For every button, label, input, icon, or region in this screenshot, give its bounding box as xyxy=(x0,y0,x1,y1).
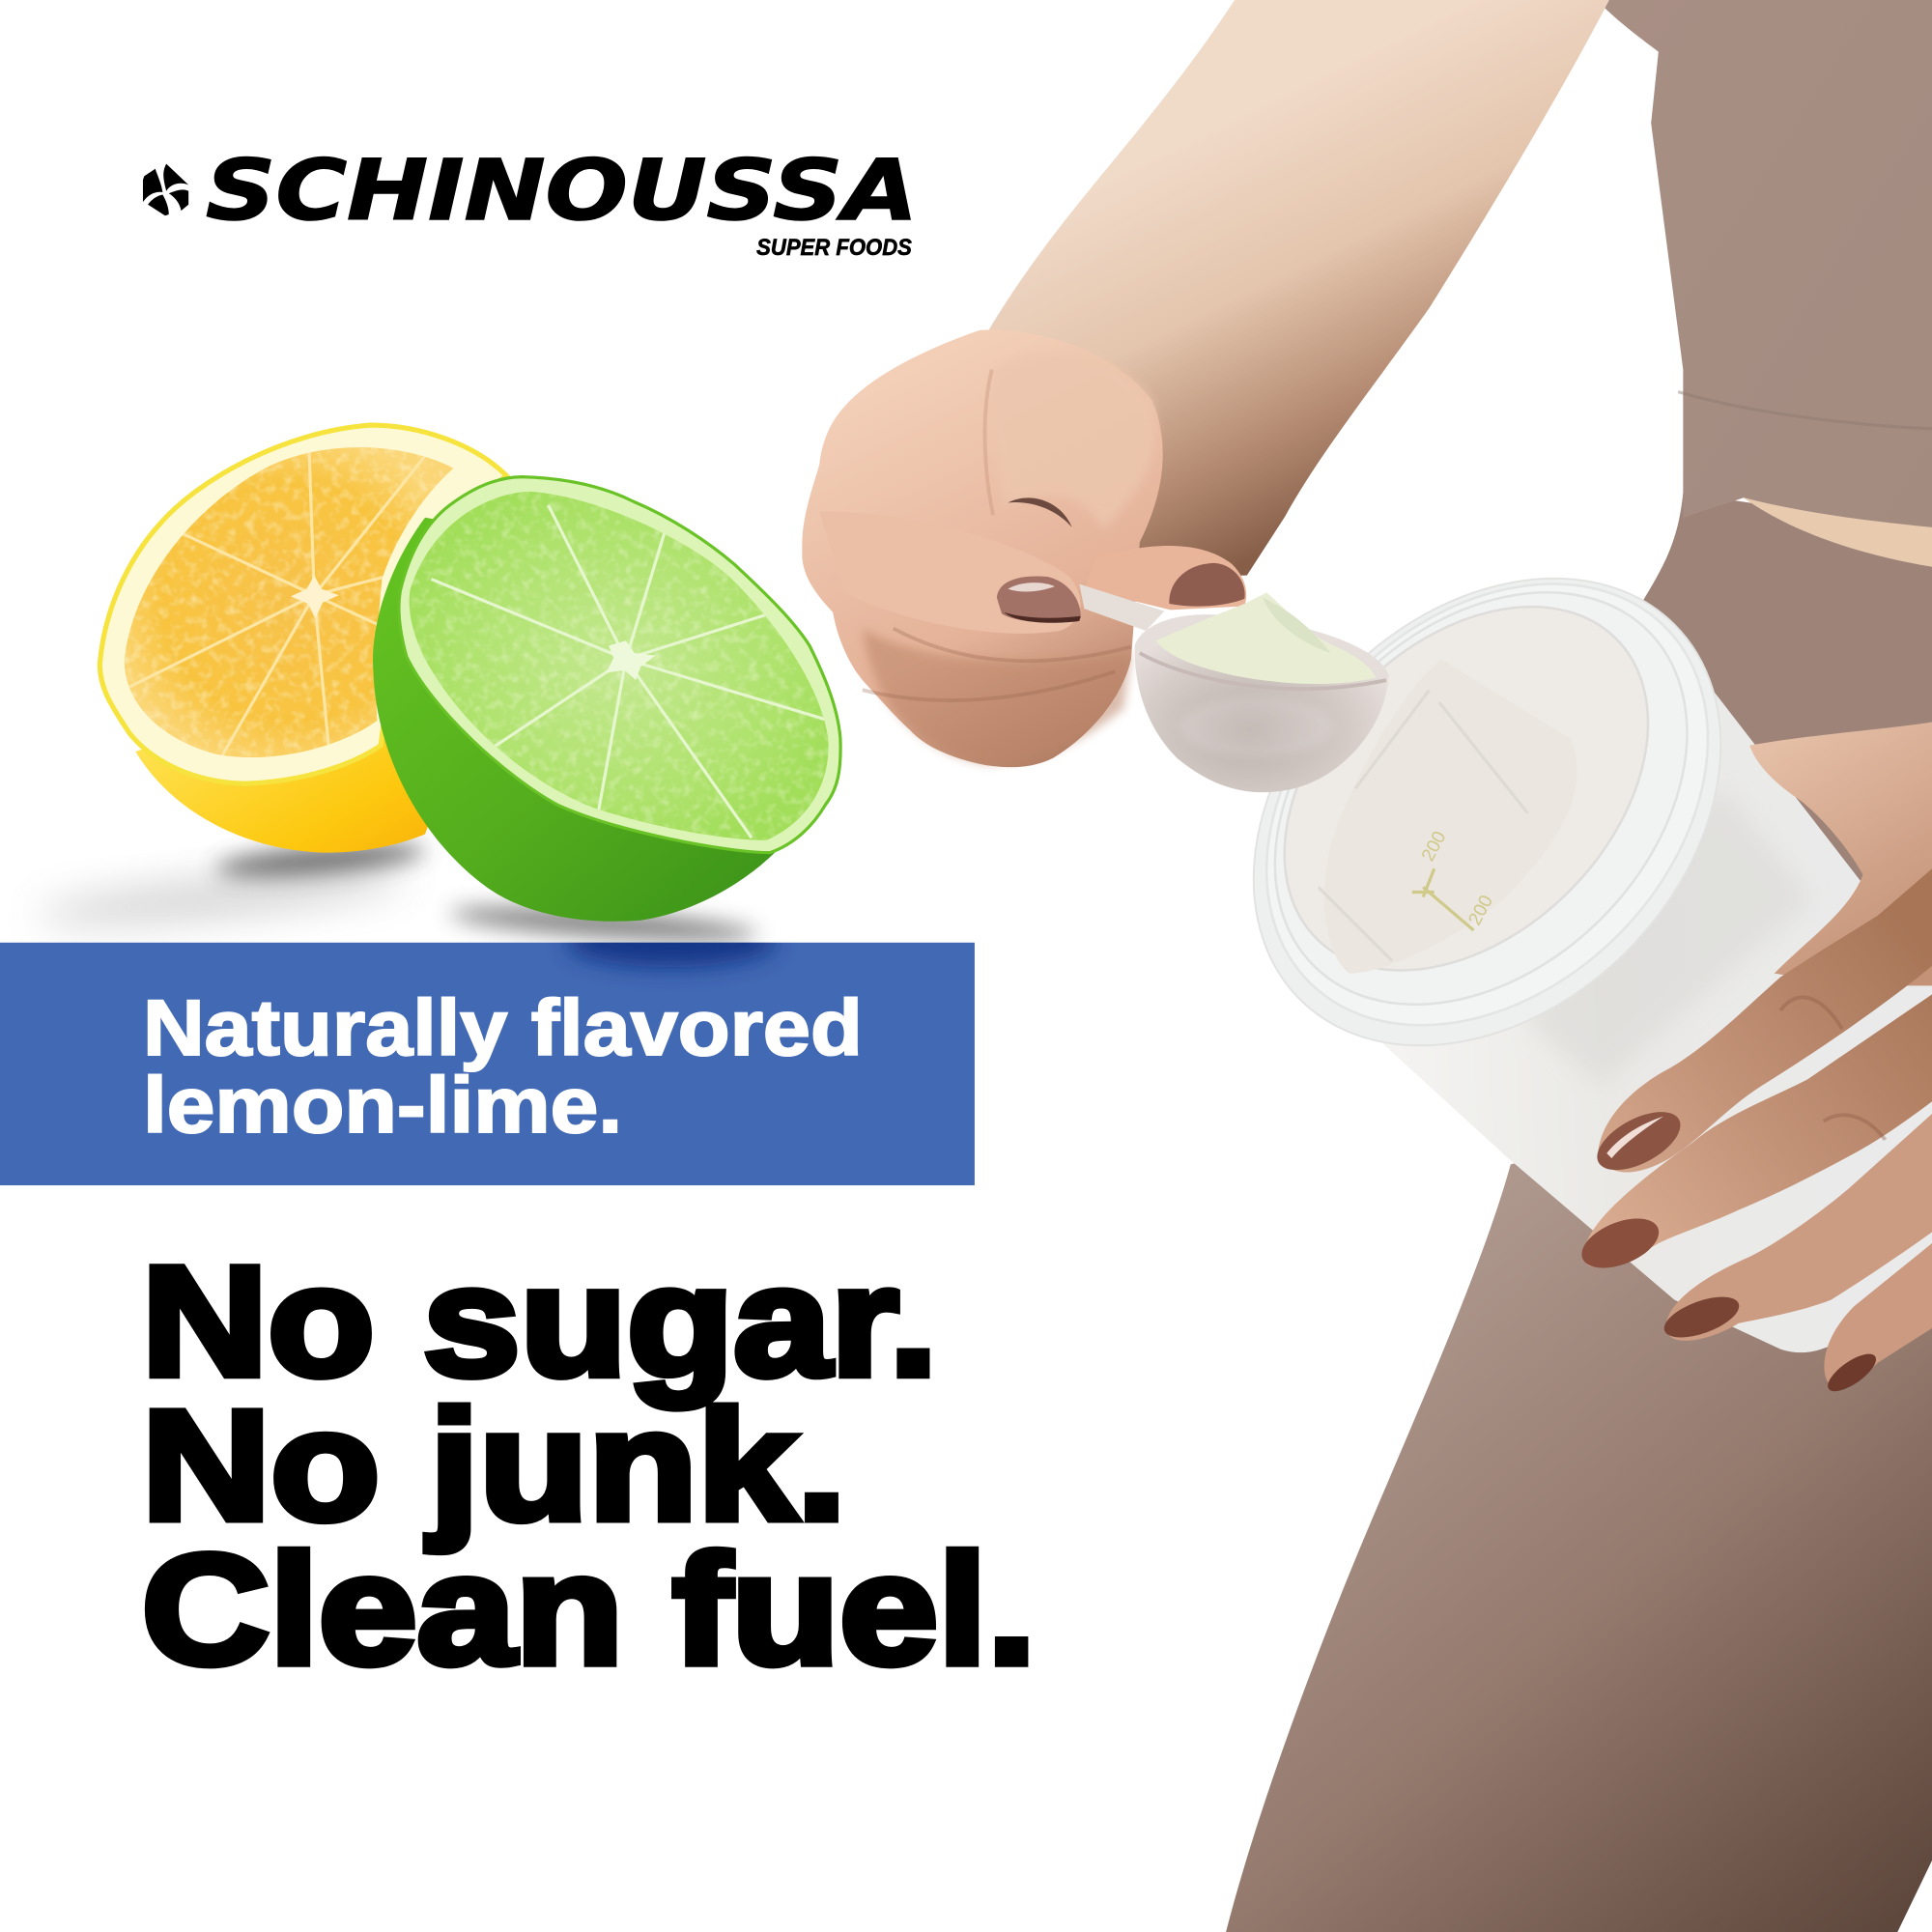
lime pith xyxy=(399,477,840,853)
scoop xyxy=(1079,584,1389,792)
headline line one: No sugar. xyxy=(142,1234,938,1408)
inner divider lines xyxy=(1319,690,1528,961)
index finger xyxy=(1084,546,1246,610)
leggings lower xyxy=(1226,1109,1932,1932)
powder mound xyxy=(1155,593,1377,684)
hand holding scoop xyxy=(802,329,1246,767)
measure markings xyxy=(1412,868,1474,930)
torso top garment xyxy=(1597,0,1932,532)
banner shadow xyxy=(560,943,784,978)
knuckle crease xyxy=(1780,997,1886,1140)
lime segments xyxy=(431,505,850,850)
measure label two: 200 xyxy=(1464,892,1497,929)
lime flesh xyxy=(410,492,829,840)
jar opening xyxy=(1213,536,1719,1041)
lime pulp texture xyxy=(401,487,838,850)
finger shadow xyxy=(863,629,1131,764)
rim ridge inner xyxy=(1194,511,1769,1086)
lemon rind xyxy=(135,640,493,853)
nail two xyxy=(1575,1208,1665,1278)
shaker jar xyxy=(1160,485,1932,1352)
lemon pith xyxy=(99,425,506,783)
banner line one: Naturally flavored xyxy=(143,984,863,1072)
hand back xyxy=(1749,722,1932,985)
folded knuckle xyxy=(990,353,1155,529)
palm and fingers xyxy=(802,329,1163,767)
icon: logo pinwheel xyxy=(143,164,188,215)
lemon segments xyxy=(129,452,426,755)
finger four xyxy=(1824,1243,1932,1387)
lemon flesh xyxy=(125,447,453,757)
thumb nail sliver xyxy=(1008,497,1072,527)
holding hand xyxy=(1575,722,1932,1398)
finger crease xyxy=(863,629,1131,700)
jar inner panel shade xyxy=(1528,788,1811,1084)
lime half xyxy=(373,477,850,922)
index nail xyxy=(1169,563,1245,607)
nail highlight xyxy=(1008,582,1055,591)
scoop speckle xyxy=(1180,696,1333,757)
nail one xyxy=(1588,1100,1690,1182)
scoop handle xyxy=(1079,584,1164,631)
headline xyxy=(142,1234,1037,1697)
lemon core xyxy=(291,576,339,618)
finger three xyxy=(1665,1114,1932,1341)
lemon shadow wide xyxy=(36,861,408,933)
scoop lip xyxy=(1140,653,1386,689)
logo xyxy=(143,142,918,261)
thumb nail xyxy=(997,576,1081,622)
nail one highlight xyxy=(1606,1117,1663,1158)
lemon half xyxy=(99,419,518,853)
brand tagline: SUPER FOODS xyxy=(756,235,912,261)
nail four xyxy=(1822,1348,1882,1398)
jar rim outer xyxy=(1160,485,1814,1139)
jar body xyxy=(1306,690,1932,1352)
lime core xyxy=(607,640,656,680)
lime shadow xyxy=(449,901,758,947)
lemon shadow xyxy=(214,838,426,883)
powder shade xyxy=(1263,598,1331,653)
finger one xyxy=(1598,868,1932,1173)
waist skin strip xyxy=(1744,497,1932,567)
jar inner base panel xyxy=(1324,659,1577,974)
banner line two: lemon-lime. xyxy=(143,1062,622,1150)
scoop bowl xyxy=(1135,614,1389,792)
banner background xyxy=(0,943,975,1185)
arm xyxy=(985,0,1609,579)
thumb xyxy=(819,511,1081,634)
nail three xyxy=(1659,1289,1745,1346)
banner xyxy=(0,918,975,1185)
lime rind xyxy=(373,518,788,922)
headline line three: Clean fuel. xyxy=(142,1522,1037,1697)
top garment band xyxy=(1678,392,1932,429)
lemon and lime xyxy=(36,419,850,947)
finger two xyxy=(1584,994,1932,1267)
nail tip shadow xyxy=(1005,612,1081,623)
rim ridge xyxy=(1179,497,1796,1113)
measure label one: 200 xyxy=(1418,828,1451,865)
brand wordmark: SCHINOUSSA xyxy=(206,142,918,240)
headline line two: No junk. xyxy=(142,1378,846,1553)
leggings waist xyxy=(1641,493,1932,1233)
crease xyxy=(985,370,993,515)
lemon pulp texture xyxy=(125,447,445,757)
